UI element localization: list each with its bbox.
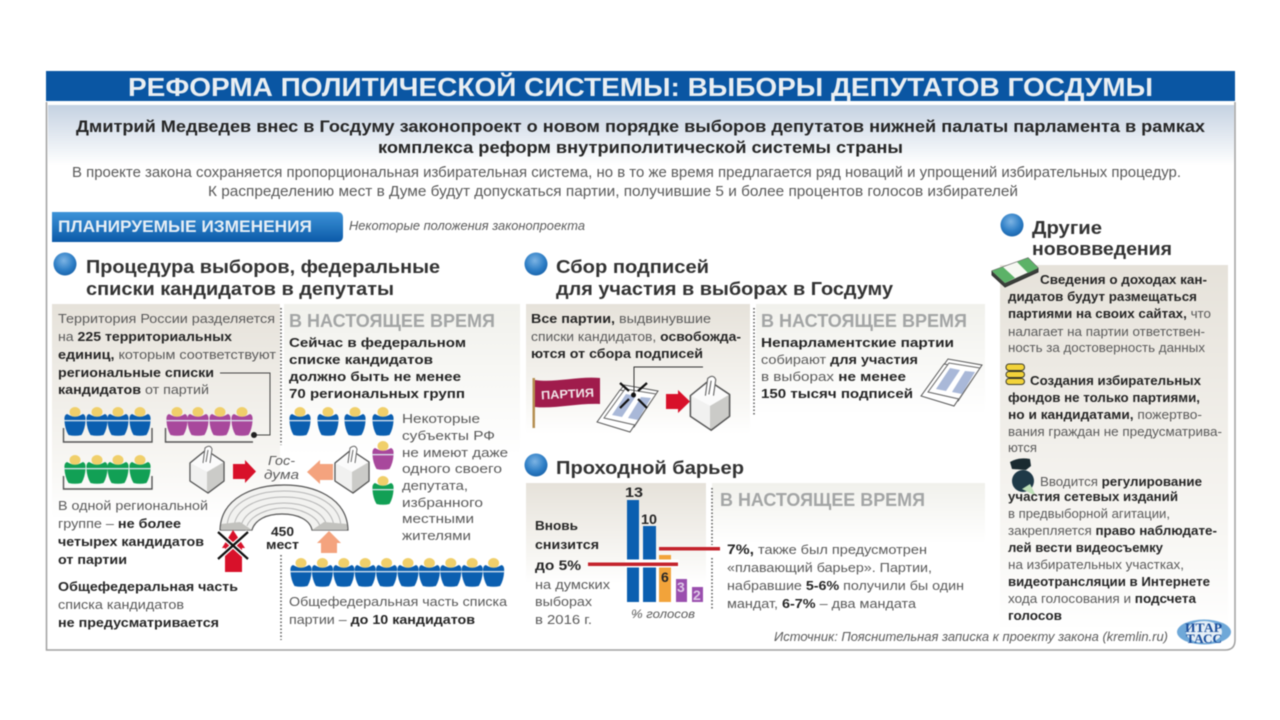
heading: threshold — [524, 454, 744, 478]
text: non-parliamentary parties: 150 тысяч подписей — [761, 386, 913, 401]
text: election funds: но и кандидатами, пожертво- — [1008, 408, 1202, 422]
label: Gosduma: Гос- — [268, 453, 296, 468]
text: drop to 5%: выборах — [535, 594, 593, 609]
text: election funds: Создания избирательных — [1030, 374, 1201, 388]
text: drop to 5%: до 5% — [535, 557, 582, 573]
arrow salmon — [307, 460, 333, 484]
text: election funds — [1008, 374, 1222, 455]
text: floating barrier: 7%, также был предусмотрен — [727, 541, 927, 557]
text: regional group limit: от партии — [58, 552, 127, 567]
text: non-parliamentary parties — [761, 335, 954, 401]
icon: signature sheets — [921, 359, 982, 406]
text: online media and video: в предвыборной агитации, — [1008, 507, 1170, 521]
heading: other innovations — [1000, 214, 1172, 259]
text: federal part: не предусматривается — [58, 615, 219, 630]
text: current federal list: Сейчас в федеральном — [289, 335, 466, 350]
text: all parties: Все партии, выдвинувшие — [531, 311, 711, 326]
text: federal part of list: Общефедеральная часть списка — [289, 594, 508, 609]
text: election funds: вания граждан не предусматрива- — [1008, 425, 1222, 439]
text: some regions: не имеют даже — [402, 445, 508, 460]
heading: at present: В НАСТОЯЩЕЕ ВРЕМЯ — [761, 311, 967, 331]
text: income data: ность за достоверность данных — [1008, 341, 1206, 355]
threshold line 7% — [659, 547, 720, 550]
text: regional group limit — [58, 498, 208, 567]
icon: signature sheets crossed — [597, 367, 703, 432]
heading: other innovations: нововведения — [1032, 239, 1172, 259]
text: drop to 5%: снизится — [535, 537, 599, 552]
text: federal part: Общефедеральная часть — [58, 579, 238, 594]
text: some regions: жителями — [402, 528, 471, 543]
text: online media and video: хода голосования и подсчета — [1008, 592, 1197, 606]
intro block: В проекте закона сохраняется пропорциональная избирательная система, но в то же время предлагается ряд новаций и упрощений избирательных процедур. — [72, 165, 1181, 181]
bar chart: votes: % голосов — [631, 607, 695, 621]
section banner: planned changes: Некоторые положения законопроекта — [349, 219, 585, 233]
ballot box right — [335, 446, 369, 493]
icon: party flag: ПАРТИЯ — [541, 386, 594, 402]
text: all parties: ются от сбора подписей — [531, 346, 703, 361]
text: some regions — [402, 411, 508, 543]
text: federal part of list — [289, 594, 508, 627]
label: 450 seats: мест — [266, 537, 299, 552]
text: some regions: местными — [402, 511, 474, 526]
icon: party flag — [532, 378, 600, 428]
text: federal part — [58, 579, 238, 630]
text: territorial units: Территория России разделяется — [58, 311, 275, 326]
text: some regions: избранного — [402, 495, 483, 510]
panel: election procedure — [52, 252, 520, 640]
text: income data: партиями на своих сайтах, что — [1008, 307, 1211, 321]
text: drop to 5%: на думских — [535, 577, 611, 592]
text: federal part: списка кандидатов — [58, 597, 184, 612]
text: some regions: депутата, — [402, 478, 468, 493]
text: online media and video: закрепляется право наблюдате- — [1008, 524, 1217, 538]
intro block: Дмитрий Медведев внес в Госдуму законопроект о новом порядке выборов депутатов нижней палаты парламента в рамках — [76, 118, 1206, 136]
arrow red — [666, 390, 690, 413]
text: non-parliamentary parties: Непарламентские партии — [761, 335, 954, 350]
panel: signature collection — [524, 252, 985, 434]
text: non-parliamentary parties: в выборах не менее — [761, 369, 906, 384]
salmon up arrow — [317, 531, 341, 553]
text: all parties: списки кандидатов, освобожда- — [531, 329, 741, 344]
text: regional group limit: четырех кандидатов — [58, 534, 204, 549]
text: drop to 5% — [535, 518, 611, 627]
text: online media and video — [1008, 475, 1217, 623]
logo: ITAR-TASS: ТАСС — [1186, 631, 1222, 646]
intro block — [48, 105, 1234, 200]
text: regional group limit: В одной региональной — [58, 498, 208, 513]
text: floating barrier: набравшие 5-6% получили бы один — [727, 578, 964, 593]
text: floating barrier: «плавающий барьер». Партии, — [727, 560, 932, 575]
regional groups of candidates — [64, 407, 253, 489]
label: Gosduma: дума — [264, 467, 299, 482]
text: floating barrier: мандат, 6-7% – два мандата — [727, 596, 917, 611]
panel: threshold — [524, 454, 985, 627]
ballot box left — [190, 446, 224, 493]
text: territorial units: на 225 территориальных — [58, 329, 233, 344]
text: current federal list: 70 региональных групп — [289, 386, 465, 401]
text: territorial units: кандидатов от партий — [58, 382, 209, 397]
text: floating barrier — [727, 541, 964, 611]
text: all parties — [531, 311, 741, 361]
text: election funds: фондов не только партиями, — [1008, 391, 1200, 405]
text: territorial units — [58, 311, 276, 397]
text: drop to 5%: в 2016 г. — [535, 612, 592, 627]
text: income data: налагает на партии ответствен- — [1008, 325, 1205, 339]
federal ten candidates — [290, 558, 505, 587]
text: online media and video: видеотрансляции в Интернете — [1008, 575, 1210, 589]
icon: camera — [1010, 458, 1036, 496]
text: online media and video: Вводится регулирование — [1040, 475, 1202, 489]
heading: signatures: для участия в выборах в Госдуму — [556, 279, 893, 299]
text: online media and video: участия сетевых изданий — [1008, 490, 1178, 504]
heading: election procedure: списки кандидатов в депутаты — [86, 279, 394, 299]
logo: ITAR-TASS — [1177, 620, 1231, 646]
label: 450 seats: 450 — [271, 524, 294, 539]
heading: at present: В НАСТОЯЩЕЕ ВРЕМЯ — [720, 490, 925, 510]
heading: at present: В НАСТОЯЩЕЕ ВРЕМЯ — [289, 311, 495, 331]
bar chart: votes — [625, 484, 703, 621]
text: online media and video: голосов — [1008, 609, 1062, 623]
intro block: комплекса реформ внутриполитической системы страны — [378, 139, 903, 157]
text: current federal list: должно быть не менее — [289, 369, 461, 384]
logo: ITAR-TASS: ИТАР — [1185, 620, 1222, 635]
crossed-out red arrow — [218, 530, 248, 572]
heading: threshold: Проходной барьер — [556, 458, 744, 478]
text: income data: Сведения о доходах кан- — [1040, 273, 1207, 287]
Duma hemicycle — [220, 485, 348, 530]
ballot box — [690, 376, 730, 430]
intro block: К распределению мест в Думе будут допускаться партии, получившие 5 и более процентов голосов избирателей — [208, 184, 1018, 200]
current regional candidates — [289, 407, 394, 505]
section banner: planned changes — [52, 212, 585, 242]
text: some regions: субъекты РФ — [402, 428, 495, 443]
text: current federal list: списке кандидатов — [289, 352, 433, 367]
text: online media and video: на избирательных участках, — [1008, 558, 1184, 572]
text: territorial units: единиц, которым соответствуют — [58, 347, 276, 362]
text: income data — [1008, 273, 1211, 355]
heading: election procedure: Процедура выборов, федеральные — [86, 257, 440, 277]
bar chart: votes: 13 — [625, 484, 643, 500]
arrow red — [233, 460, 256, 483]
text: some regions: Некоторые — [402, 411, 480, 426]
text: territorial units: региональные списки — [58, 365, 214, 380]
icon: money — [992, 258, 1038, 287]
heading: signatures: Сбор подписей — [556, 257, 709, 277]
bar chart: votes: 2 — [693, 587, 701, 603]
heading: other innovations: Другие — [1032, 218, 1102, 238]
text: some regions: одного своего — [402, 461, 502, 476]
text: current federal list — [289, 335, 466, 401]
threshold line 5% — [588, 562, 678, 566]
bar chart: votes: 6 — [661, 569, 669, 585]
text: federal part of list: партии – до 10 кандидатов — [289, 612, 475, 627]
icon: coins — [1006, 364, 1024, 384]
bar chart: votes: 10 — [641, 511, 657, 527]
heading: election procedure — [54, 252, 440, 299]
label: 450 seats — [266, 524, 299, 552]
text: non-parliamentary parties: собирают для участия — [761, 352, 918, 367]
heading: signatures — [524, 252, 893, 299]
section banner: planned changes: ПЛАНИРУЕМЫЕ ИЗМЕНЕНИЯ — [58, 217, 312, 236]
text: election funds: ются — [1008, 441, 1037, 455]
text: drop to 5%: Вновь — [535, 518, 578, 533]
label: Gosduma — [264, 453, 299, 482]
frame — [46, 102, 1235, 650]
text: online media and video: лей вести видеосъемку — [1008, 541, 1163, 555]
bar chart: votes: 3 — [677, 579, 685, 595]
title bar: РЕФОРМА ПОЛИТИЧЕСКОЙ СИСТЕМЫ: ВЫБОРЫ ДЕПУТАТОВ ГОСДУМЫ — [128, 72, 1153, 102]
text: regional group limit: группе – не более — [58, 516, 181, 531]
panel: other innovations — [992, 214, 1228, 630]
text: income data: дидатов будут размещаться — [1008, 290, 1197, 304]
source: Источник: Пояснительная записка к проекту закона (kremlin.ru) — [774, 630, 1168, 644]
